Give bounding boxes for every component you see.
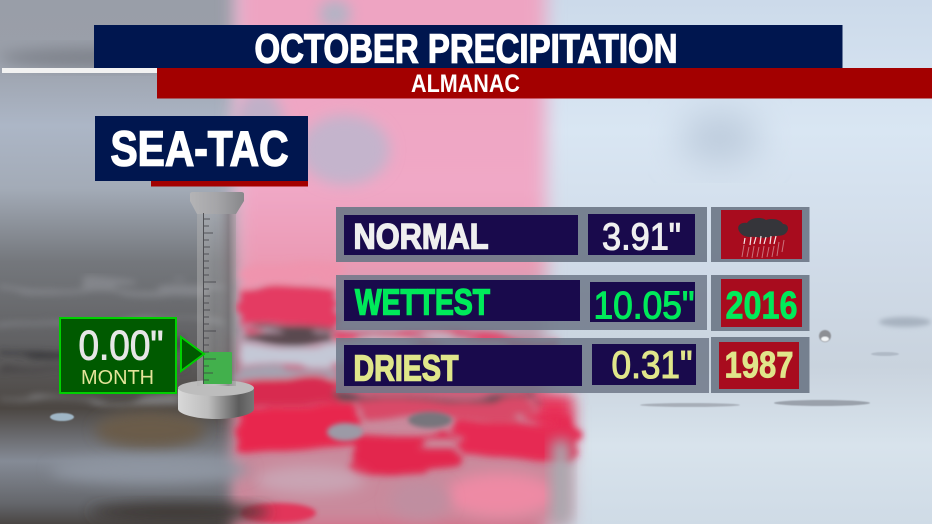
normal label: NORMAL — [354, 218, 488, 256]
title bar: OCTOBER PRECIPITATION — [254, 26, 678, 72]
callout: month total: MONTH — [81, 367, 154, 389]
wettest label: WETTEST — [355, 282, 490, 322]
gauge tube — [197, 210, 236, 386]
normal value: 3.91" — [602, 216, 681, 258]
row: wettest — [336, 275, 707, 330]
gauge scale ticks — [204, 213, 216, 384]
location label: SEA-TAC — [95, 116, 308, 186]
gauge funnel — [190, 192, 244, 214]
driest panel — [336, 338, 709, 393]
driest label — [344, 345, 582, 388]
gauge base — [178, 380, 254, 419]
panel: wettest year — [711, 275, 810, 331]
panel: wettest year: 2016 — [726, 284, 798, 328]
panel: driest year: 1987 — [724, 344, 794, 386]
driest label: DRIEST — [354, 348, 459, 388]
icon: storm cloud with rain — [738, 218, 788, 258]
rain gauge — [178, 192, 254, 419]
panel: rain icon — [711, 207, 810, 262]
panel: driest year — [711, 337, 810, 393]
normal label — [344, 215, 578, 256]
green water level — [203, 352, 232, 384]
callout: month total — [60, 318, 176, 393]
subtitle bar — [2, 68, 932, 98]
wettest value: 10.05" — [594, 284, 694, 328]
normal panel — [336, 207, 707, 262]
subtitle bar: ALMANAC — [411, 70, 520, 98]
wettest panel — [336, 275, 707, 330]
title bar — [94, 25, 842, 72]
driest value: 0.31" — [612, 344, 692, 387]
row: normal — [336, 207, 707, 262]
callout: month total: 0.00" — [78, 322, 164, 368]
row: driest — [336, 338, 709, 393]
location label: SEA-TAC: SEA-TAC — [110, 122, 288, 176]
callout pointer arrow — [181, 337, 204, 371]
